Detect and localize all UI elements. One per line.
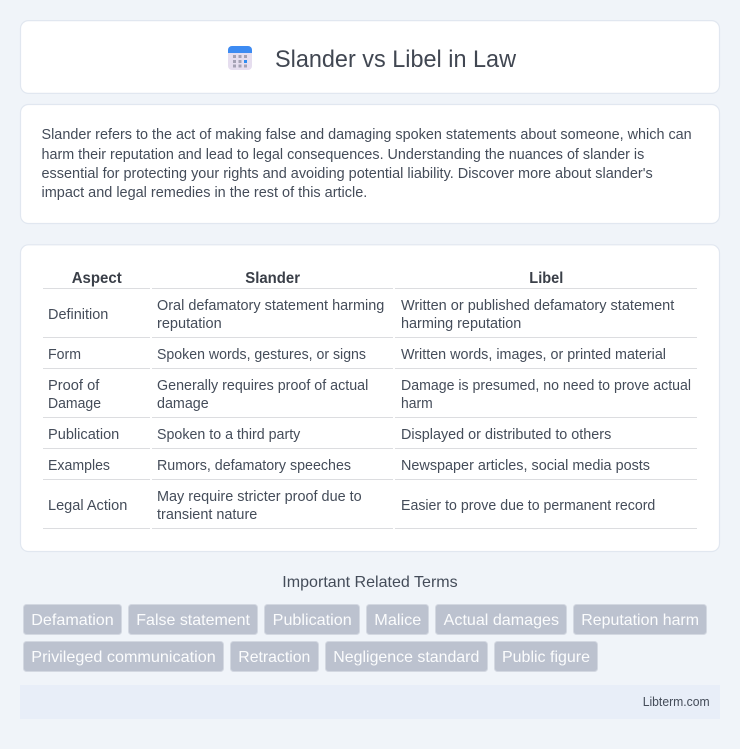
row: legal action: transient nature xyxy=(157,507,257,523)
table header row: Libel xyxy=(529,270,563,287)
row: definition: reputation xyxy=(157,316,222,332)
chip: reputation harm xyxy=(574,604,706,634)
chip: negligence standard: Negligence standard xyxy=(333,649,479,666)
row: definition xyxy=(48,298,674,332)
chip: defamation: Defamation xyxy=(31,612,114,629)
related term chips xyxy=(24,604,706,672)
row: proof of damage: Damage xyxy=(48,396,101,412)
row: legal action xyxy=(48,489,655,523)
row: examples: Rumors, defamatory speeches xyxy=(157,458,351,474)
row: publication xyxy=(48,427,611,443)
intro text: harm their reputation and lead to legal consequences. Understanding the nuances of slander is xyxy=(42,147,644,163)
intro text: essential for protecting your rights and avoiding potential liability. Discover more about slander's xyxy=(42,166,653,182)
intro text xyxy=(42,127,692,201)
table header row: Aspect xyxy=(72,270,122,287)
footer credit: Libterm.com xyxy=(643,695,710,709)
intro text: Slander refers to the act of making false and damaging spoken statements about someone, which can xyxy=(42,127,692,143)
row: examples: Examples xyxy=(48,458,110,474)
row: form: Form xyxy=(48,347,81,363)
row: form: Written words, images, or printed material xyxy=(401,347,666,363)
row: definition: Written or published defamatory statement xyxy=(401,298,674,314)
row: form: Spoken words, gestures, or signs xyxy=(157,347,366,363)
table header row: Slander xyxy=(245,270,300,287)
chip: actual damages xyxy=(436,604,566,634)
row: publication: Publication xyxy=(48,427,119,443)
icon: calendar xyxy=(228,46,252,70)
row: examples xyxy=(48,458,650,474)
chip: public figure xyxy=(494,642,598,672)
chip: privileged communication xyxy=(24,642,224,672)
row: proof of damage: Proof of xyxy=(48,378,99,394)
chip: actual damages: Actual damages xyxy=(444,612,559,629)
chip: negligence standard xyxy=(326,642,488,672)
chip: defamation xyxy=(24,604,122,634)
chip: privileged communication: Privileged communication xyxy=(31,649,216,666)
row: publication: Spoken to a third party xyxy=(157,427,301,443)
chip: retraction: Retraction xyxy=(238,649,310,666)
row: definition: Oral defamatory statement harming xyxy=(157,298,384,314)
row: legal action: May require stricter proof due to xyxy=(157,489,362,505)
row: publication: Displayed or distributed to others xyxy=(401,427,611,443)
chip: publication xyxy=(264,604,360,634)
chip: malice: Malice xyxy=(374,612,421,629)
row: legal action: Easier to prove due to permanent record xyxy=(401,498,655,514)
chip: false statement: False statement xyxy=(136,612,251,629)
footer bar xyxy=(20,685,720,719)
chip: public figure: Public figure xyxy=(502,649,590,666)
chip: retraction xyxy=(230,642,318,672)
row: proof of damage: damage xyxy=(157,396,209,412)
row: legal action: Legal Action xyxy=(48,498,127,514)
chip: reputation harm: Reputation harm xyxy=(581,612,699,629)
row: proof of damage: Generally requires proof of actual xyxy=(157,378,368,394)
panel: title header xyxy=(20,21,720,93)
chip: malice xyxy=(366,604,428,634)
row: definition: Definition xyxy=(48,307,108,323)
heading: important related terms: Important Related Terms xyxy=(282,574,458,591)
panel: comparison table xyxy=(20,245,720,552)
row: proof of damage xyxy=(48,378,691,412)
title: Slander vs Libel in Law xyxy=(275,46,517,73)
row: definition: harming reputation xyxy=(401,316,521,332)
chip: publication: Publication xyxy=(273,612,352,629)
row: examples: Newspaper articles, social media posts xyxy=(401,458,650,474)
intro text: impact and legal remedies in the rest of this article. xyxy=(42,185,367,201)
row: form xyxy=(48,347,666,363)
chip: false statement xyxy=(128,604,258,634)
table header row xyxy=(72,270,563,287)
row: proof of damage: Damage is presumed, no need to prove actual xyxy=(401,378,691,394)
row: proof of damage: harm xyxy=(401,396,433,412)
panel: introduction xyxy=(20,104,720,224)
